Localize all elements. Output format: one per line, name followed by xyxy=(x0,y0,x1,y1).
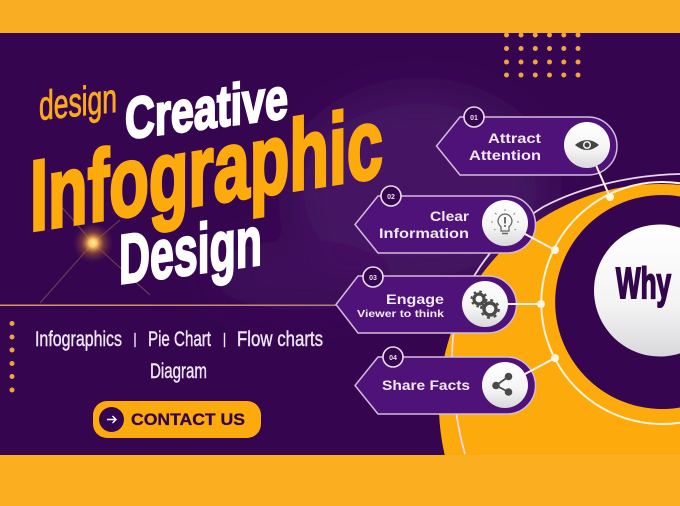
service list: Infographics xyxy=(35,328,122,351)
title: Creative: Creative xyxy=(125,66,288,152)
outer thin arc xyxy=(452,174,680,454)
service list xyxy=(35,328,323,383)
connector 2 xyxy=(525,234,559,254)
bubble 3: Engage Viewer to think xyxy=(336,267,516,333)
connector 1 xyxy=(596,166,614,201)
bubble 3: Engage Viewer to think: Engage xyxy=(386,291,444,307)
bubble 1: Attract Attention xyxy=(436,107,617,175)
bottom orange band xyxy=(0,455,680,506)
service list: Diagram xyxy=(150,360,207,383)
bubble 1: Attract Attention: 01 xyxy=(470,115,478,122)
bubble 3: Engage Viewer to think: 03 xyxy=(369,275,377,282)
bubble 4: Share Facts xyxy=(355,347,536,414)
white ring xyxy=(541,182,680,424)
white centre circle xyxy=(594,224,680,356)
contact button: CONTACT US xyxy=(131,410,245,429)
title: design: design xyxy=(39,75,117,129)
service list: Pie Chart xyxy=(148,328,211,351)
bubble 4: Share Facts: 04 xyxy=(389,355,397,362)
background photo texture xyxy=(210,90,550,310)
title: Design: Design xyxy=(119,201,262,299)
contact button xyxy=(93,401,261,438)
bubble 2: Clear Information: Information xyxy=(379,225,469,241)
dot grid decoration xyxy=(504,32,580,78)
orange circle xyxy=(439,184,680,455)
dark inner circle xyxy=(555,195,680,409)
horizontal rule xyxy=(0,304,336,306)
light flare xyxy=(40,205,150,303)
vertical dots xyxy=(10,321,14,392)
bubble 1: Attract Attention: Attract xyxy=(488,130,541,146)
circular diagram xyxy=(439,174,680,455)
bubble 1: Attract Attention: Attention xyxy=(469,147,541,163)
bubble 2: Clear Information xyxy=(355,186,536,253)
service list: Flow charts xyxy=(237,328,323,351)
bubble 4: Share Facts: Share Facts xyxy=(382,377,470,393)
top orange band xyxy=(0,0,680,34)
icon: light bulb xyxy=(482,200,528,246)
icon: eye xyxy=(564,122,610,168)
connector 3 xyxy=(508,300,545,308)
connector 4 xyxy=(525,354,559,374)
icon: share xyxy=(482,362,528,408)
bubble 2: Clear Information: 02 xyxy=(387,194,395,201)
bubble 3: Engage Viewer to think: Viewer to think xyxy=(357,308,444,320)
icon: gears xyxy=(462,281,508,327)
title: Infographic: Infographic xyxy=(30,87,383,253)
bubble 2: Clear Information: Clear xyxy=(430,208,470,224)
